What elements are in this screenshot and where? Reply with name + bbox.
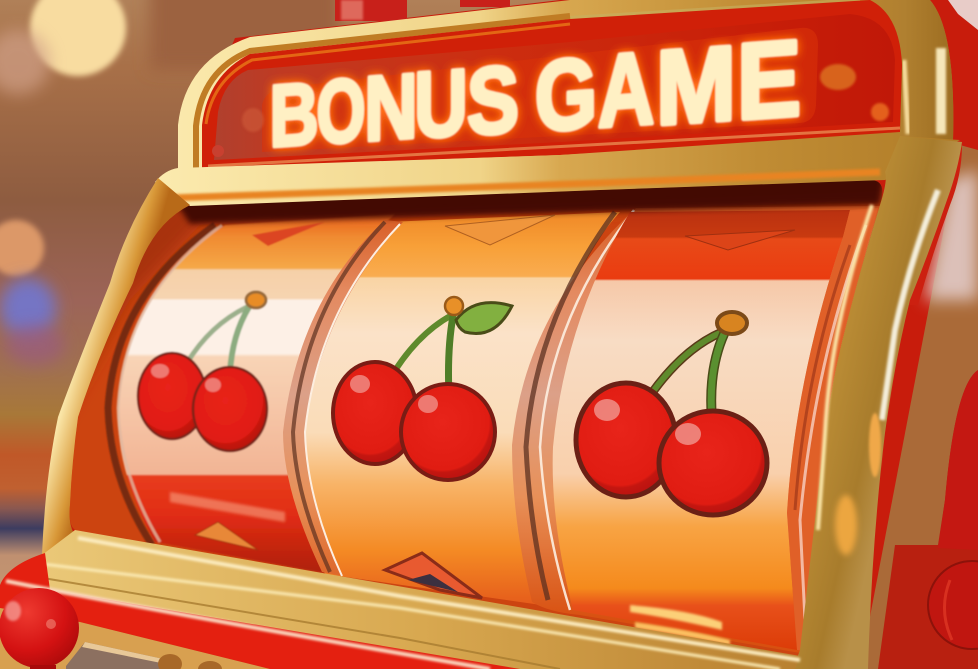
right background corner — [948, 0, 978, 30]
sign title — [269, 17, 801, 166]
sign gold arch — [178, 0, 953, 170]
reel 2 glass flange — [283, 220, 403, 576]
sign title: G — [535, 37, 597, 153]
red trim strip — [908, 145, 962, 305]
cherries: reel 3 — [576, 312, 767, 515]
sign title: U — [414, 49, 468, 158]
reel 3 glass flange — [512, 206, 880, 655]
frame right side — [793, 136, 962, 669]
sign title: B — [269, 64, 319, 166]
panel: bonus game sign — [202, 0, 902, 168]
sign title: O — [316, 60, 366, 163]
cherries: reel 2 — [333, 297, 512, 480]
frame top bar — [155, 136, 960, 206]
sign title: S — [467, 46, 519, 156]
sign title: M — [656, 24, 736, 148]
sign title: A — [598, 31, 654, 149]
reel 3 — [512, 206, 880, 655]
reel window — [60, 170, 890, 669]
bokeh lights — [0, 0, 126, 365]
red side button — [928, 561, 978, 649]
metal slot — [66, 642, 168, 669]
top red knobs — [335, 0, 510, 21]
sign plate — [214, 14, 895, 160]
sign red border — [202, 0, 902, 168]
bottom red ledge — [0, 553, 520, 669]
reel 1 — [108, 214, 395, 575]
top window shadow — [178, 180, 882, 228]
sign title: N — [364, 53, 418, 161]
reel 3 panel — [553, 210, 850, 650]
sign title: E — [737, 17, 801, 142]
cherries: reel 1 — [138, 292, 267, 451]
frame left side — [42, 178, 190, 555]
inner lit plate — [262, 28, 818, 152]
reel 2 — [283, 212, 620, 612]
sign lights — [820, 64, 856, 90]
lower red panel — [878, 370, 978, 669]
frame bottom bar — [42, 530, 800, 669]
right flange — [787, 208, 878, 652]
lever ball — [0, 588, 79, 669]
gold frame — [42, 136, 962, 669]
right side body — [860, 145, 978, 669]
